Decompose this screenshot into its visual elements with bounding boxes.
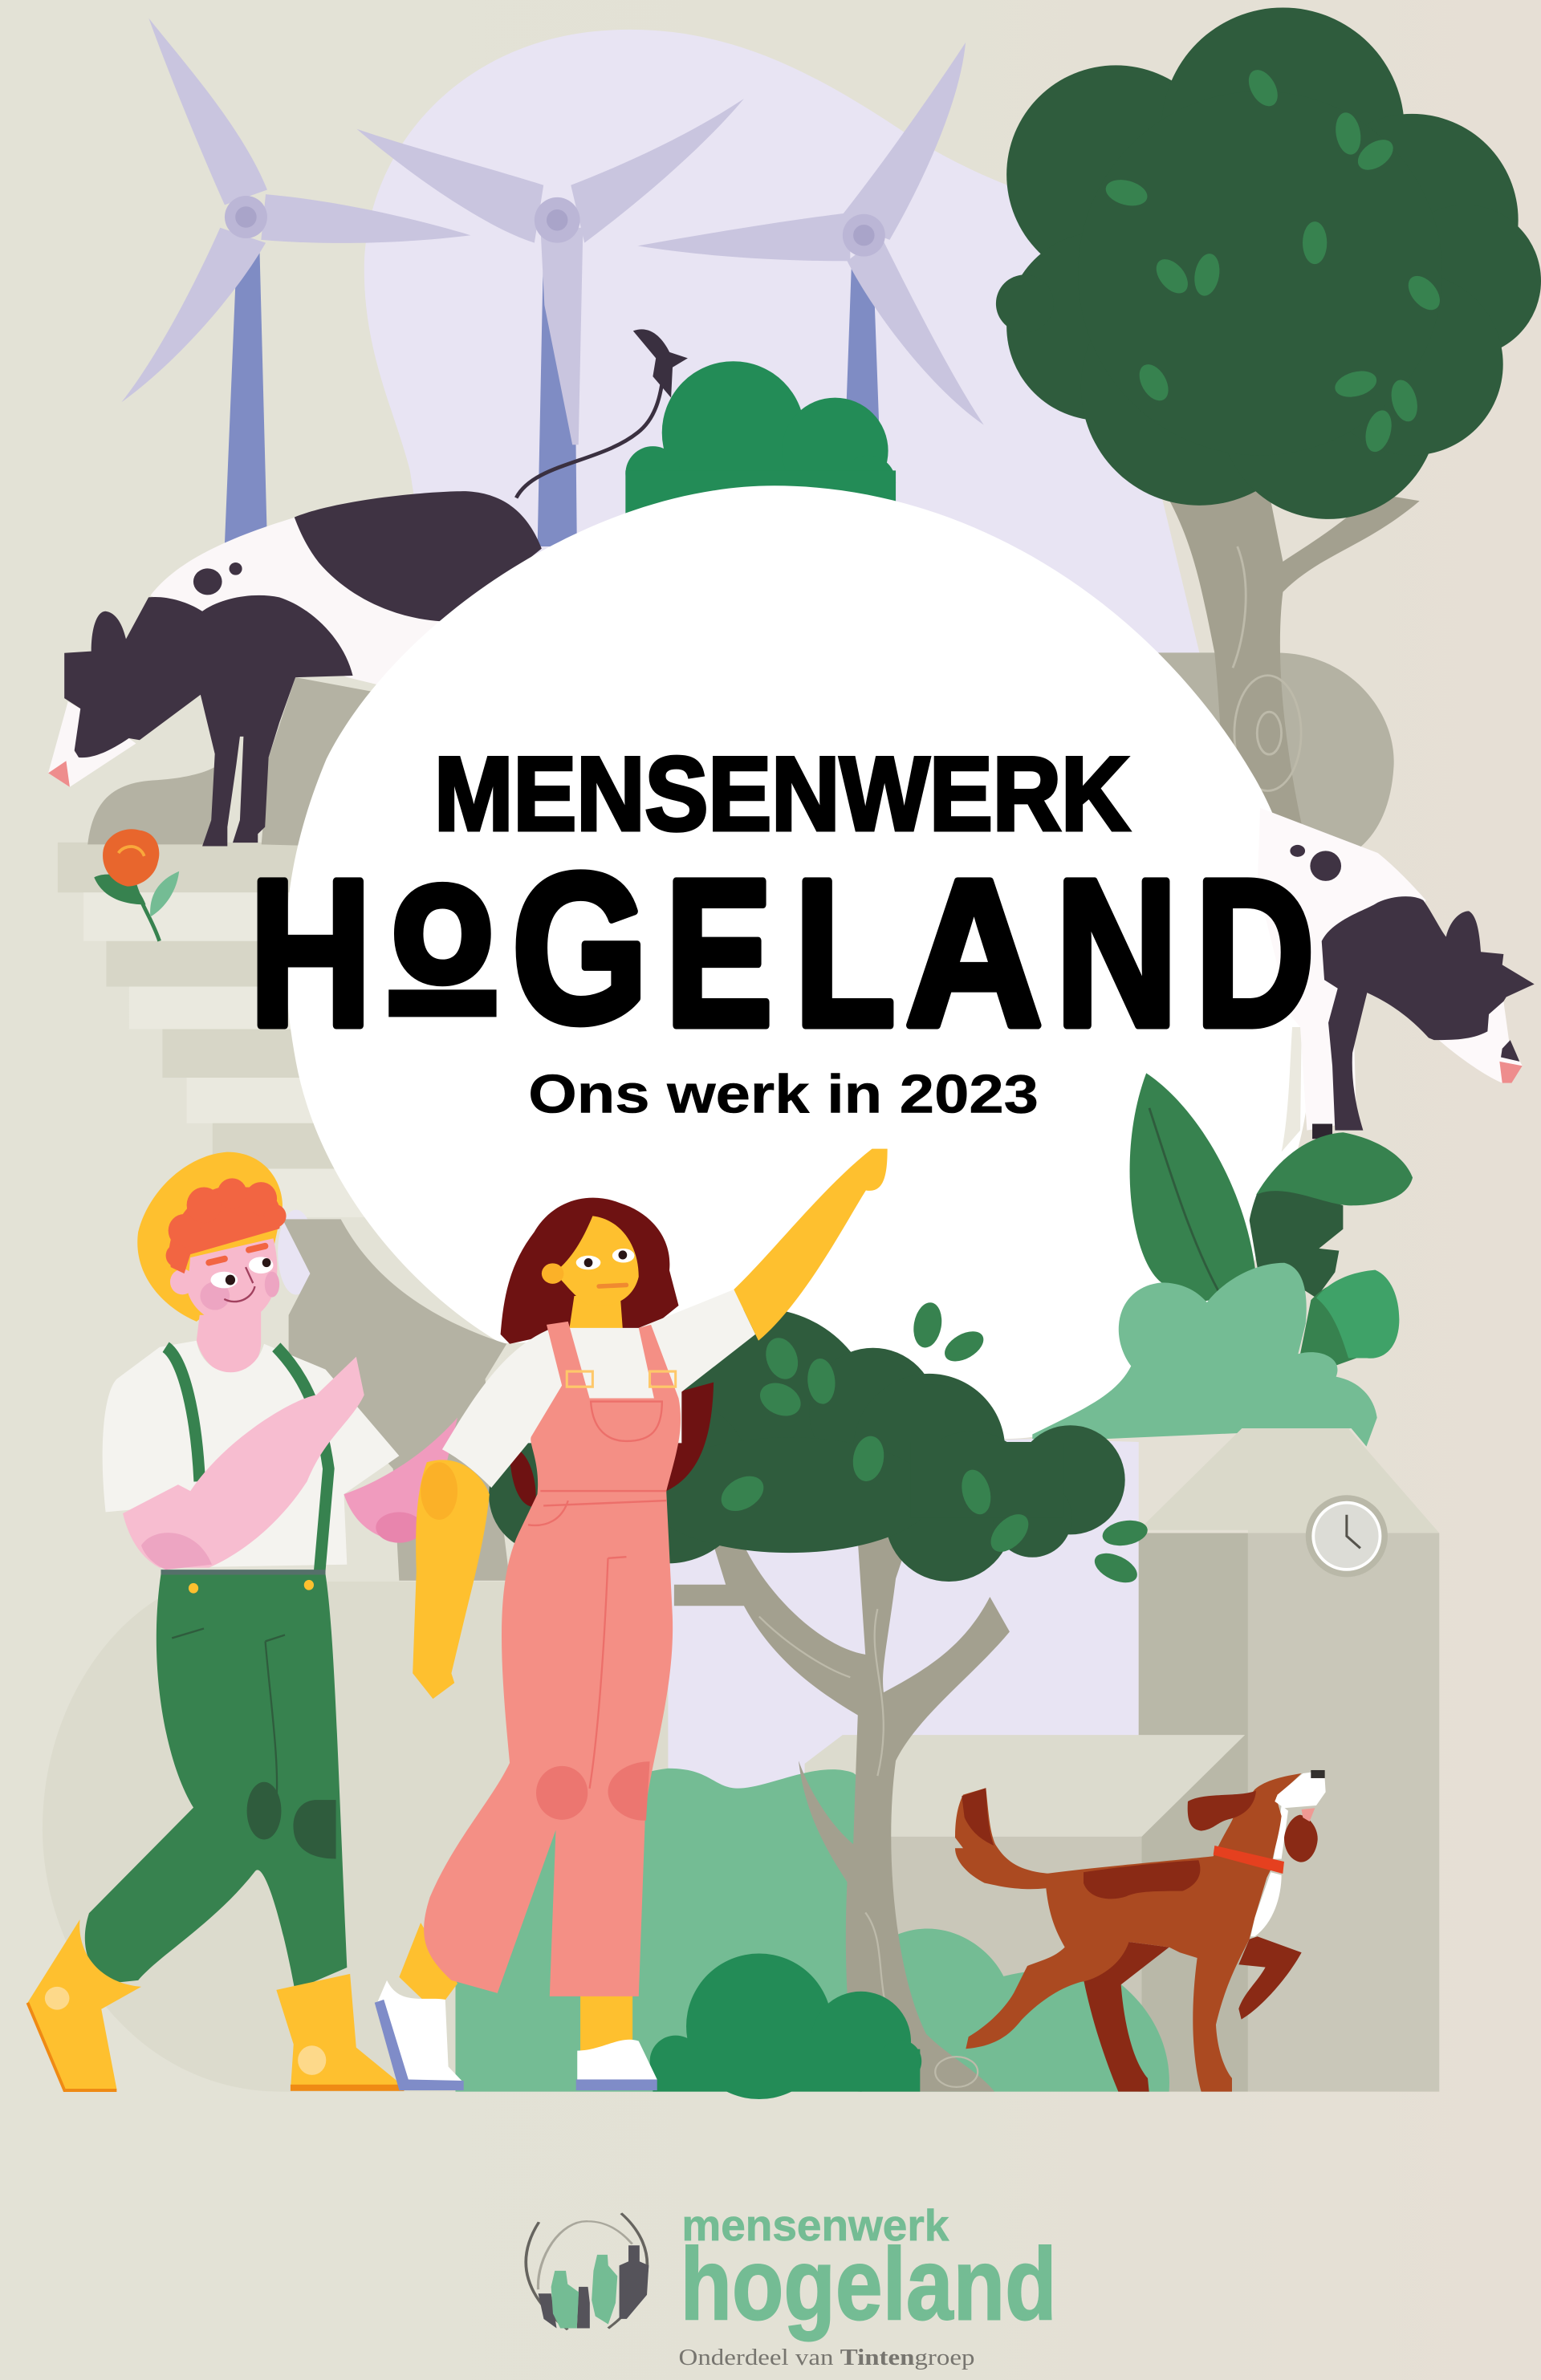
shirt <box>103 1341 399 1568</box>
lower arm <box>413 1460 490 1699</box>
wind turbines <box>121 18 984 546</box>
black front, leg and head <box>1322 896 1535 1131</box>
light green bush <box>1032 1263 1377 1447</box>
left cow with mound <box>48 491 542 848</box>
logo text <box>679 2200 1057 2370</box>
tall house roof <box>1139 1428 1439 1533</box>
heading line: Hogeland <box>249 830 1315 1070</box>
hat <box>137 1152 283 1322</box>
low house wall <box>880 1837 1142 2092</box>
overalls <box>424 1322 681 1996</box>
cow snout <box>48 701 136 787</box>
front patch, legs and head <box>64 595 353 846</box>
hair <box>166 1178 287 1273</box>
light green bush bottom <box>455 1769 1169 2092</box>
people <box>27 1149 888 2091</box>
big leaf <box>1130 1073 1257 1302</box>
mensenwerk: mensenwerk <box>681 2200 949 2250</box>
heading line: Hogeland: E <box>665 837 773 1070</box>
logo emblem <box>526 2213 649 2329</box>
cow body <box>1258 808 1426 1131</box>
dark grey wedge <box>283 1219 510 1581</box>
hair <box>501 1198 679 1344</box>
title block <box>249 735 1315 1125</box>
heading line: Hogeland: O <box>395 862 490 1007</box>
grey circle behind trunk <box>1151 652 1394 865</box>
heading line: Hogeland: L <box>794 837 896 1070</box>
lavender ear shape <box>278 1210 315 1295</box>
heading line: Hogeland: G <box>511 830 649 1067</box>
man <box>27 1152 457 2091</box>
right shoe <box>577 2040 657 2079</box>
cow nose <box>48 761 70 787</box>
turbine 3 <box>637 43 984 425</box>
pale column <box>1282 1027 1302 1151</box>
tagline: Onderdeel van Tinten groep <box>679 2345 974 2370</box>
body spots <box>193 563 242 595</box>
collar <box>1214 1846 1284 1874</box>
near arm <box>123 1357 364 1568</box>
knees <box>536 1766 588 1820</box>
big grey circle <box>43 1582 668 2092</box>
white central blob <box>286 485 1313 1439</box>
canopy <box>489 1309 1125 1582</box>
heading line: Hogeland: D <box>1195 837 1315 1070</box>
top leaf and dark leaf <box>1250 1132 1413 1298</box>
canopy <box>996 7 1541 519</box>
dog ears <box>1188 1791 1256 1831</box>
dog tail <box>955 1788 1049 1889</box>
turbine 2 <box>357 99 744 546</box>
nose <box>1499 1062 1523 1083</box>
ankles <box>399 1923 457 2012</box>
houses <box>805 1428 1439 2092</box>
grey ground shapes behind figures <box>43 1210 668 2092</box>
subtitle: Ons werk in 2023 <box>528 1064 1039 1125</box>
neck <box>568 1296 624 1338</box>
cow body <box>150 518 541 688</box>
right cow <box>1250 808 1535 1367</box>
rear patch <box>295 491 542 622</box>
trunk and branches <box>674 1533 1010 2092</box>
right boot <box>276 1974 402 2090</box>
central tree <box>489 1300 1149 2092</box>
dog front raised leg <box>1238 1936 1302 2020</box>
spots <box>1290 845 1341 881</box>
snout <box>1275 1771 1326 1808</box>
hogeland: hogeland <box>680 2227 1057 2341</box>
hoof <box>1312 1124 1332 1139</box>
far arm <box>344 1417 457 1540</box>
woman <box>375 1149 888 2090</box>
dark green bush bottom <box>650 1953 921 2099</box>
tree top right <box>996 7 1541 865</box>
plants right of white blob <box>1032 1073 1377 1447</box>
flower on stairs <box>94 829 179 941</box>
clock <box>1306 1495 1388 1577</box>
white chest <box>1250 1805 1288 1936</box>
left shoe <box>376 1980 464 2089</box>
shirt <box>442 1290 755 1488</box>
lavender sky blob <box>364 30 1199 850</box>
stairs <box>58 843 463 1217</box>
face <box>553 1216 639 1306</box>
bush behind white blob <box>625 361 896 516</box>
trunk <box>1161 485 1420 843</box>
small leaf <box>1300 1270 1399 1367</box>
suspenders <box>166 1347 328 1574</box>
leaves <box>1103 65 1446 455</box>
cow tail <box>516 329 688 498</box>
heading line: Hogeland: A <box>905 837 1043 1070</box>
low house roof <box>805 1735 1245 1837</box>
raised arm <box>734 1149 888 1341</box>
canopy leaves <box>715 1300 1149 1589</box>
snout <box>1434 1001 1523 1083</box>
face <box>187 1238 277 1324</box>
heading line: Mensenwerk: MENSENWERK <box>434 735 1129 852</box>
back patch <box>1084 1860 1200 1899</box>
grey mound lower lobe <box>87 765 218 844</box>
hair back <box>510 1383 714 1507</box>
dog body <box>966 1773 1302 2092</box>
turbine 1 <box>121 18 470 543</box>
tall house <box>1139 1533 1248 2092</box>
heading line: Hogeland: H <box>249 837 372 1070</box>
heading line: Hogeland: N <box>1055 837 1178 1070</box>
neck <box>197 1312 261 1375</box>
dog <box>955 1770 1326 2092</box>
dog back leg <box>1084 1942 1169 2092</box>
grey mound right part <box>262 677 390 848</box>
left boot <box>27 1919 141 2090</box>
pants <box>85 1574 347 1990</box>
lavender lower sky <box>668 1439 1139 1837</box>
